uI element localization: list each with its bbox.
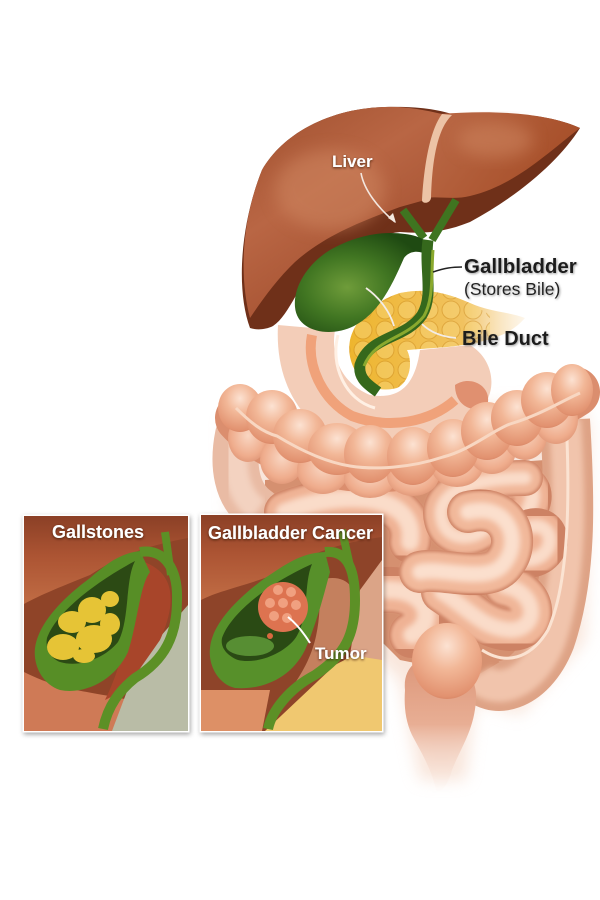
intestines group <box>218 325 593 791</box>
stomach and duodenum <box>278 325 491 440</box>
panel 2 background <box>201 528 382 600</box>
soft shadow halo <box>225 400 590 780</box>
mesentery background <box>265 460 565 680</box>
panel: gallstones <box>22 514 190 732</box>
colon line <box>236 393 580 468</box>
descending colon <box>478 420 568 686</box>
panel 1 background <box>24 530 188 604</box>
transverse colon lower row <box>228 396 578 498</box>
gallbladder with stones <box>35 532 177 729</box>
tumor <box>258 582 308 639</box>
label: Gallbladder: (Stores Bile) <box>464 279 560 299</box>
label: Liver <box>332 152 396 223</box>
label: Bile Duct <box>366 288 549 350</box>
gallbladder and ducts <box>295 200 456 392</box>
ascending colon <box>235 435 258 510</box>
label: Gallbladder: Gallbladder <box>464 255 577 278</box>
label: Bile Duct: Bile Duct <box>462 328 549 350</box>
small intestine loops <box>285 478 550 635</box>
liver <box>242 107 580 329</box>
pancreas <box>349 291 525 389</box>
label: Gallbladder <box>433 255 577 299</box>
rectum <box>405 623 482 791</box>
infographic: gallbladder anatomy <box>20 106 600 788</box>
transverse colon backing <box>240 392 575 467</box>
panel: gallbladder cancer <box>200 514 384 732</box>
colon light line <box>482 440 568 658</box>
gallbladder with tumor <box>210 530 355 729</box>
panel heading: Gallbladder Cancer <box>208 523 373 543</box>
label: Tumor: Tumor <box>315 644 367 663</box>
transverse colon upper row <box>218 364 593 485</box>
label: Liver: Liver <box>332 152 373 171</box>
panel heading: Gallstones <box>52 522 144 542</box>
